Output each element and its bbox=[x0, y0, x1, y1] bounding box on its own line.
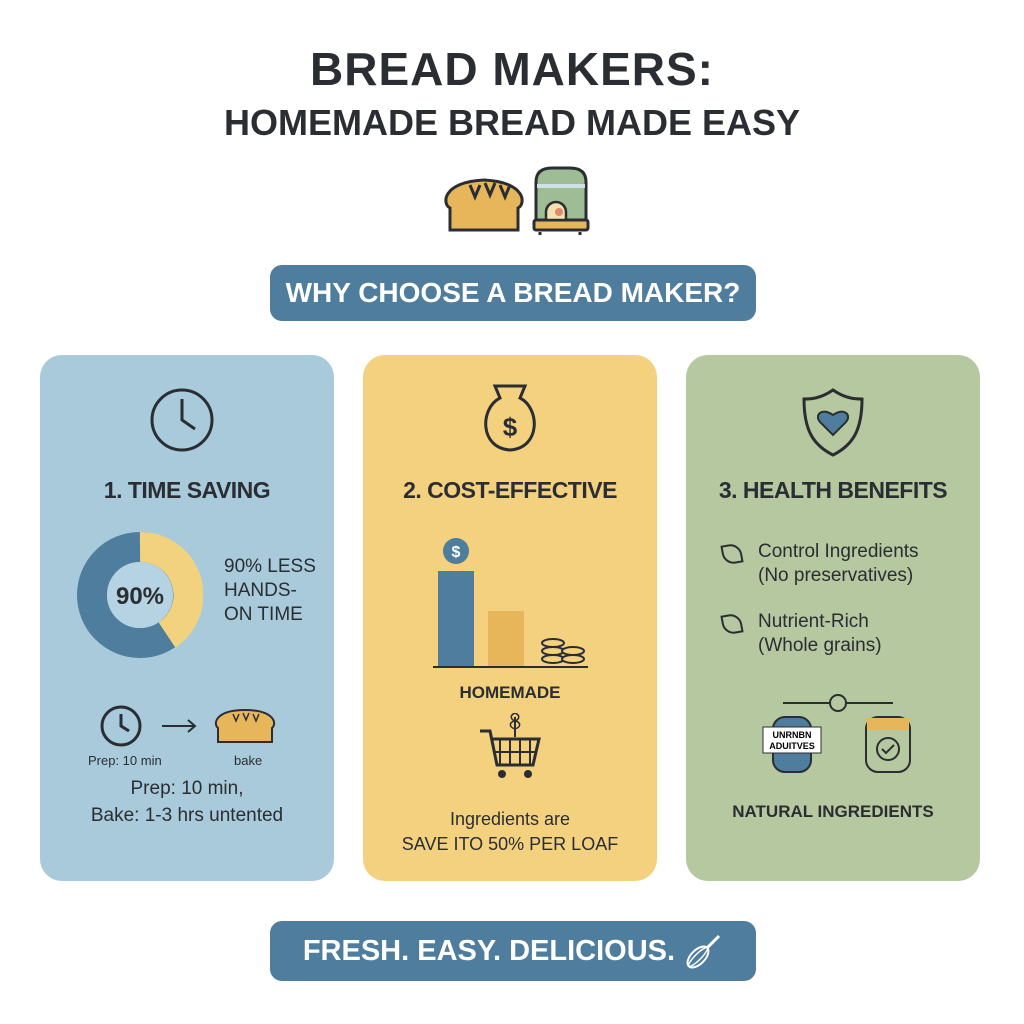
heading: 1. TIME SAVING bbox=[104, 477, 270, 503]
icon: bread and bread maker bbox=[444, 166, 590, 235]
text: Ingredients are bbox=[450, 809, 570, 829]
icon: jars: ADUITVES bbox=[769, 741, 815, 751]
bar chart: $ bbox=[452, 544, 461, 561]
list: (Whole grains) bbox=[758, 635, 882, 656]
text: less hands-on: HANDS- bbox=[224, 580, 297, 601]
icon: money bag bbox=[484, 384, 536, 452]
text: SAVE ITO 50% PER LOAF bbox=[402, 834, 618, 854]
panel: time saving bbox=[40, 355, 334, 881]
banner: fresh easy delicious: FRESH. EASY. DELICIOUS. bbox=[303, 935, 675, 967]
text: prep bake bbox=[91, 778, 283, 826]
icon: jars bbox=[762, 694, 911, 773]
icon: heart shield bbox=[802, 388, 864, 457]
icon: jars: UNRNBN bbox=[772, 730, 812, 740]
icon: money bag: $ bbox=[503, 412, 518, 442]
list: Control Ingredients bbox=[758, 541, 919, 562]
list bbox=[720, 541, 919, 656]
list: Nutrient-Rich bbox=[758, 611, 869, 632]
icon: cart bbox=[480, 713, 541, 778]
panel: cost-effective bbox=[363, 355, 657, 881]
icon: clock bbox=[150, 388, 214, 452]
text: prep bake: Bake: 1-3 hrs untented bbox=[91, 805, 283, 826]
icon: timer to bread bbox=[100, 706, 276, 746]
banner: why choose bbox=[270, 265, 756, 321]
donut chart bbox=[77, 532, 203, 658]
text: less hands-on: 90% LESS bbox=[224, 556, 316, 577]
label: HOMEMADE bbox=[459, 683, 561, 702]
banner: why choose: WHY CHOOSE A BREAD MAKER? bbox=[286, 277, 740, 308]
donut chart: 90% bbox=[116, 583, 164, 610]
text: less hands-on bbox=[224, 556, 316, 625]
bar chart bbox=[433, 538, 588, 668]
label: NATURAL INGREDIENTS bbox=[732, 802, 934, 821]
title: HOMEMADE BREAD MADE EASY bbox=[224, 102, 800, 143]
title bbox=[224, 43, 800, 143]
heading: 3. HEALTH BENEFITS bbox=[719, 477, 947, 503]
labels: Prep: 10 min bbox=[88, 753, 162, 768]
panel: health bbox=[686, 355, 980, 881]
heading: 2. COST-EFFECTIVE bbox=[403, 477, 617, 503]
banner: fresh easy delicious bbox=[270, 921, 756, 981]
text bbox=[402, 809, 618, 854]
icon: whisk bbox=[686, 935, 720, 968]
title: BREAD MAKERS: bbox=[310, 43, 714, 95]
text: prep bake: Prep: 10 min, bbox=[130, 778, 244, 799]
list: (No preservatives) bbox=[758, 565, 913, 586]
panel: time saving: bake bbox=[234, 753, 262, 768]
text: less hands-on: ON TIME bbox=[224, 604, 303, 625]
